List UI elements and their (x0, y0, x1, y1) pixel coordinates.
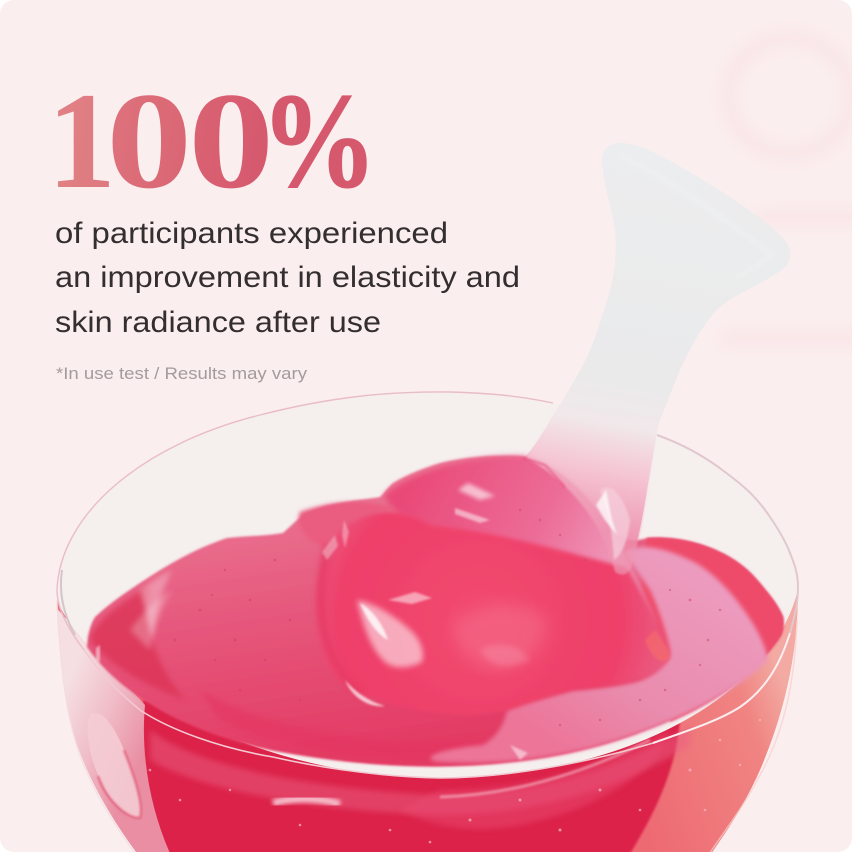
top gel lobe (385, 456, 655, 625)
spatula emerging from gel (526, 455, 650, 576)
headline: 100%: 0 (188, 64, 274, 217)
lower bowl: gel seen through glass (40, 580, 820, 852)
dark red gel behind glass (142, 700, 680, 852)
bowl outer wall (57, 600, 140, 852)
right outer red gel (640, 538, 783, 722)
glossy highlights (96, 483, 530, 760)
gel bubbles (174, 509, 721, 726)
faint blurred vertical watermark (722, 38, 852, 338)
central glossy gel lobe (316, 512, 670, 714)
spatula (526, 143, 790, 541)
headline: 100%: 1 (47, 64, 116, 217)
spatula inner bevel (618, 155, 772, 278)
right pink translucent lobe (430, 547, 768, 763)
gel fold shading (316, 544, 346, 680)
body copy: an improvement in elasticity and (55, 261, 520, 294)
headline: 100%: 0 (106, 64, 192, 217)
glass rim (57, 392, 798, 778)
red lobe bottom-right accent (645, 630, 669, 661)
glass bowl with gel and spatula (40, 143, 820, 852)
bowl interior (59, 392, 801, 788)
headline: 100%: % (261, 67, 377, 216)
left dimple reflection (88, 713, 141, 818)
body copy: of participants experienced (55, 217, 448, 250)
headline: 100% (58, 95, 367, 188)
left gel shading (90, 586, 185, 700)
center pale glow (454, 604, 547, 671)
footnote: *In use test / Results may vary (56, 364, 308, 383)
body copy: skin radiance after use (55, 306, 381, 339)
gel body (87, 456, 783, 767)
body copy (55, 217, 520, 339)
